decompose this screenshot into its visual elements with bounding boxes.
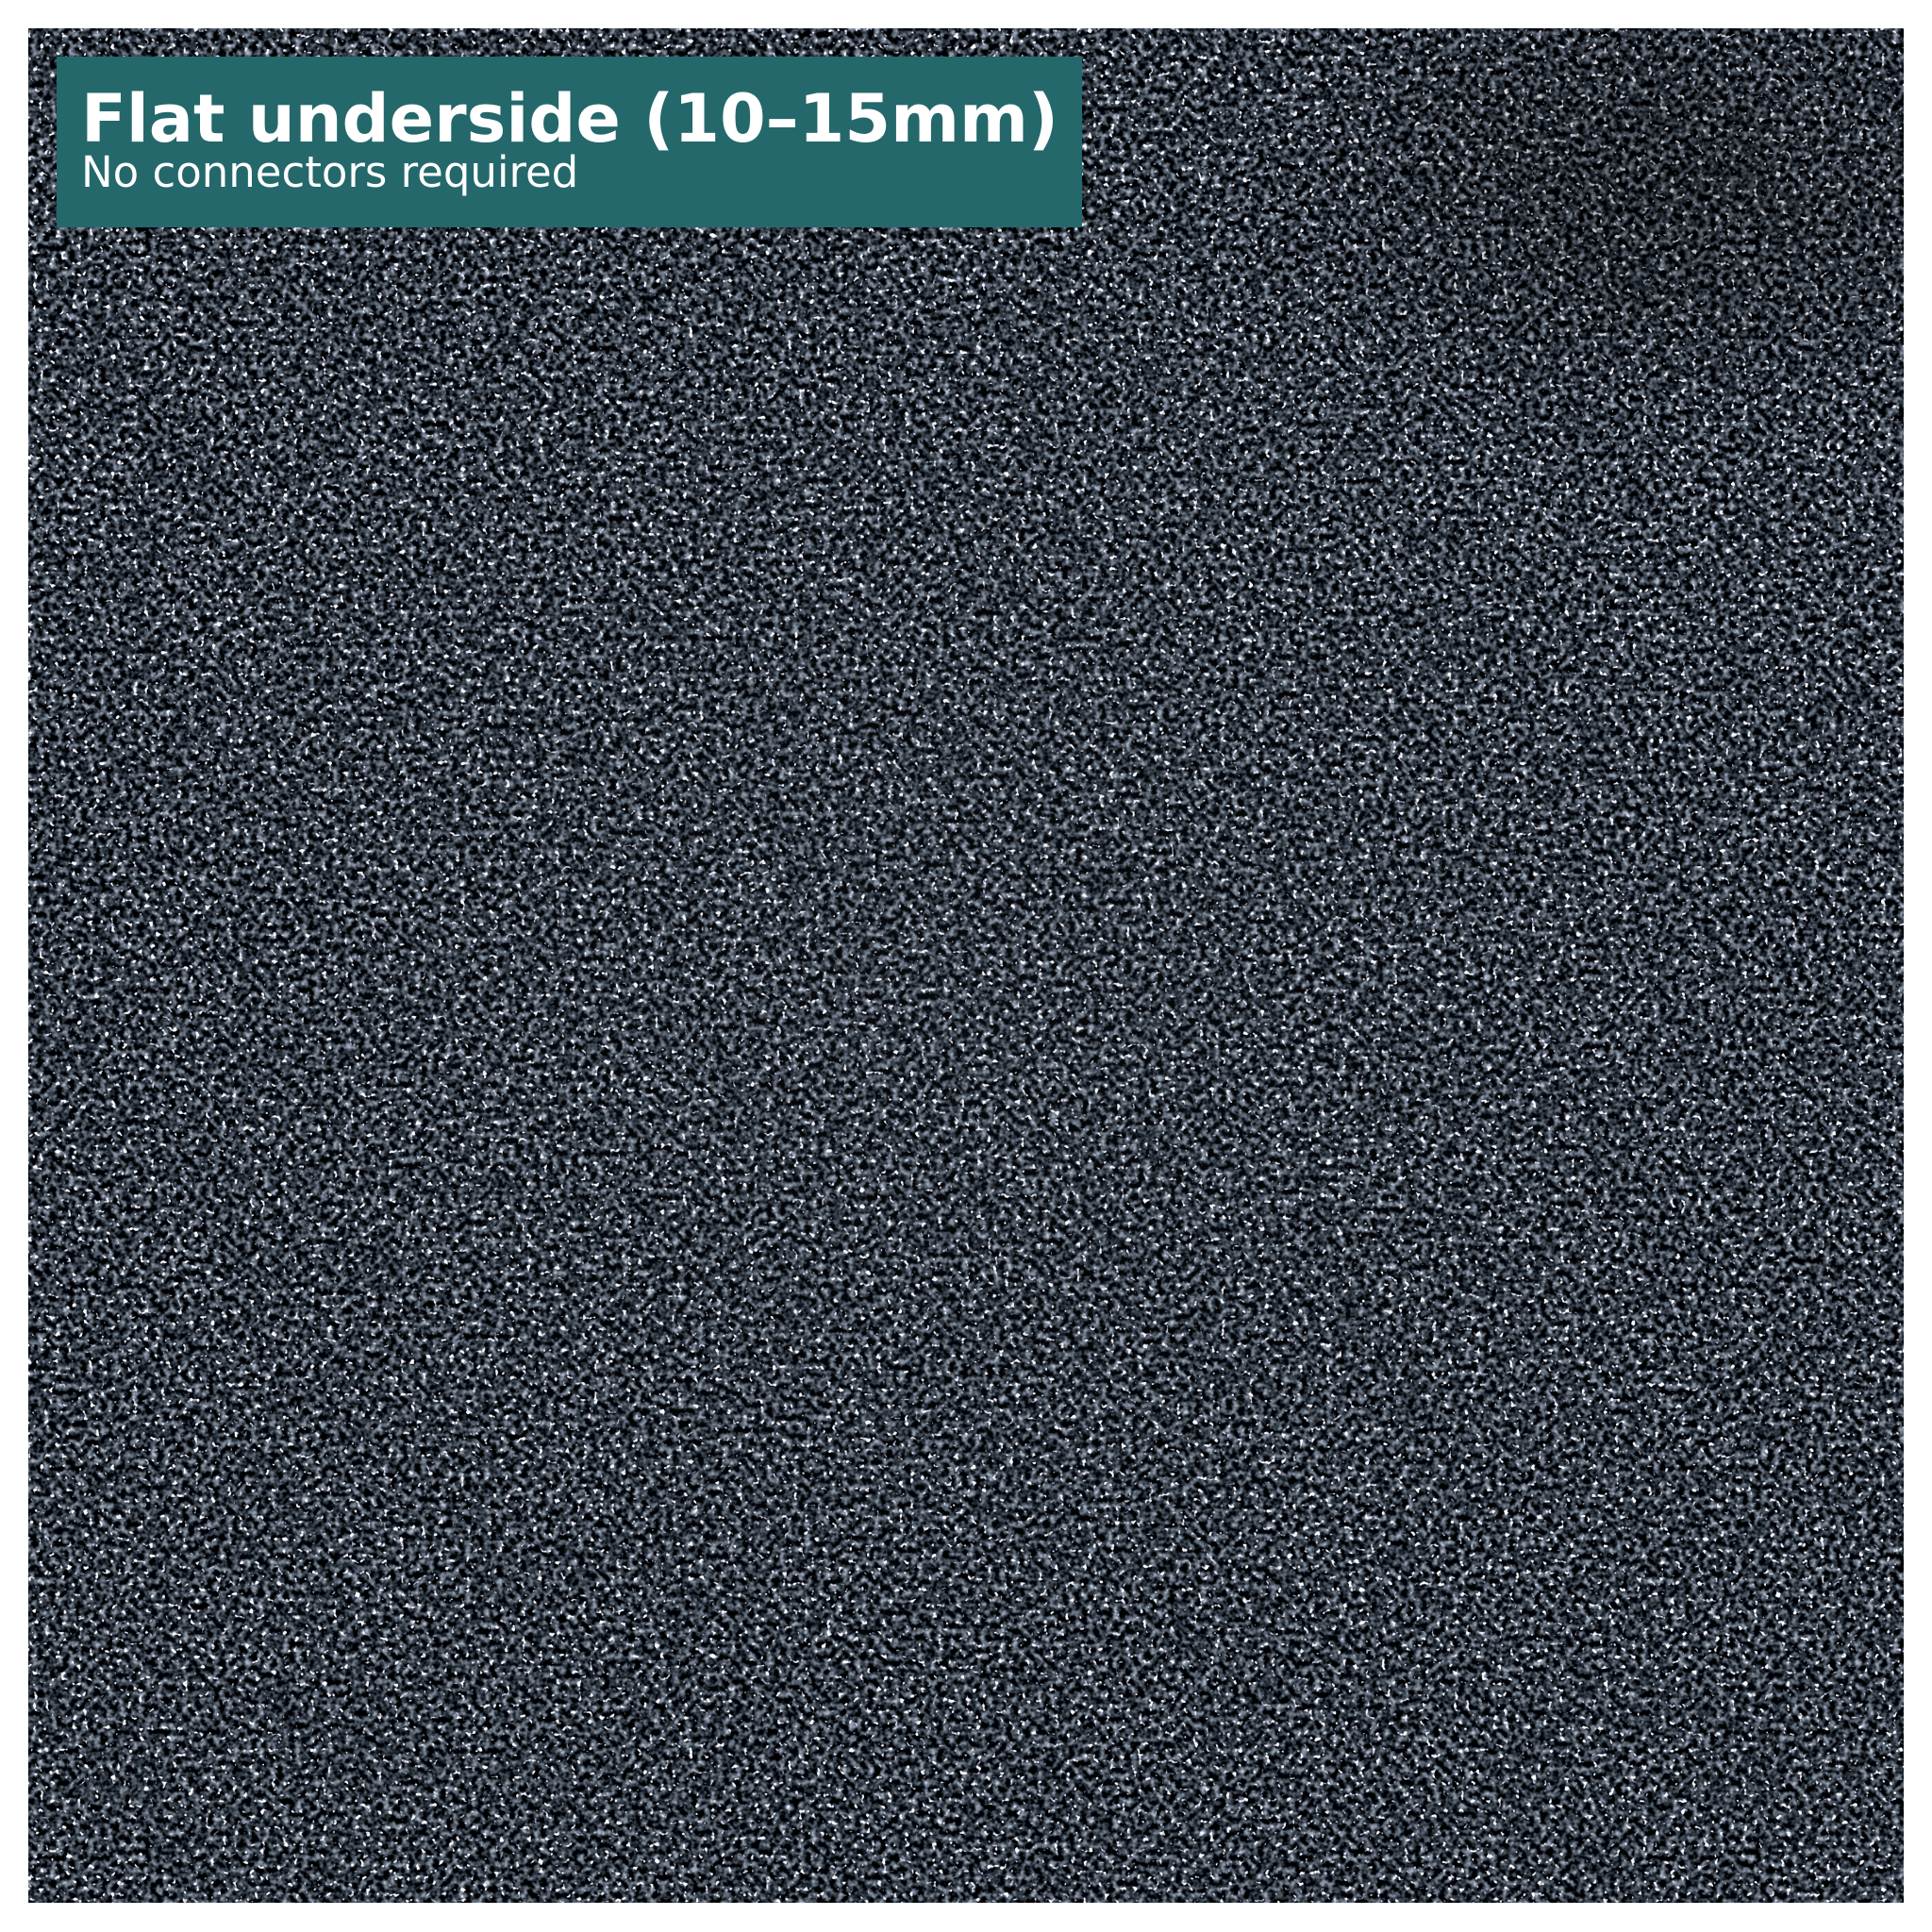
subheading: No connectors required bbox=[81, 147, 578, 197]
label: teal caption box bbox=[57, 57, 1082, 227]
heading: Flat underside (10–15mm) bbox=[81, 80, 1058, 158]
